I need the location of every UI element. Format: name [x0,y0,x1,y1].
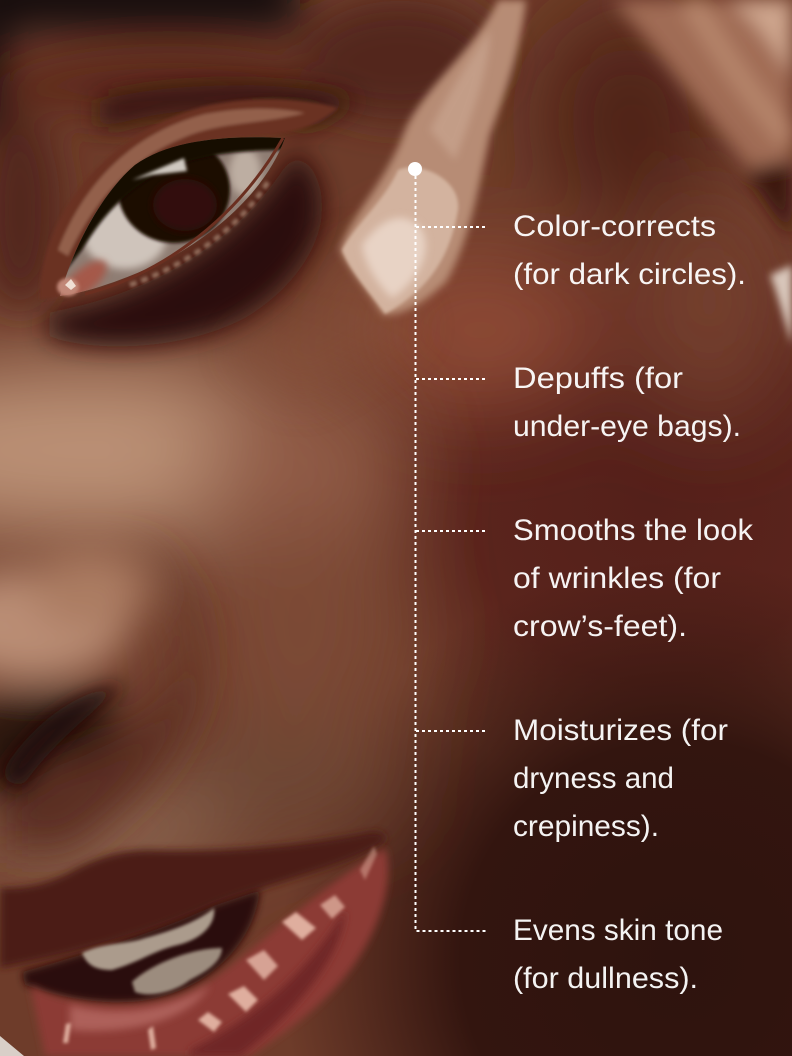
callout: smooths [513,514,754,643]
callout: moisturizes [513,714,728,843]
hand top right [612,0,792,240]
mouth interior [22,890,260,1003]
callout: color-corrects: (for dark circles). [513,258,746,291]
eye socket shadow [48,85,360,346]
brow and forehead [0,0,500,310]
lower lash line [85,138,283,294]
eyelid [40,99,338,300]
callout: smooths: Smooths the look [513,514,754,547]
callout: depuffs: under-eye bags). [513,410,741,443]
skin below socket [280,270,374,358]
cheek right side [312,0,792,1056]
callout: color-corrects [513,210,746,291]
mouth [0,832,388,1056]
callout: moisturizes: crepiness). [513,810,659,843]
serum streak [340,0,526,315]
callout: moisturizes: Moisturizes (for [513,714,728,747]
white background sliver [770,265,792,345]
upper lip [0,832,385,968]
callout leader line [408,162,488,931]
teeth [82,908,214,970]
nose contour [0,530,202,850]
callout: depuffs: Depuffs (for [513,362,683,395]
callout: color-corrects: Color-corrects [513,210,716,243]
callout: depuffs [513,362,741,443]
callout: smooths: crow’s-feet). [513,610,687,643]
cheek and nose left side [0,360,410,870]
eye [55,137,285,298]
callout: moisturizes: dryness and [513,762,674,795]
callout: evens skin tone: Evens skin tone [513,914,723,947]
callout: smooths: of wrinkles (for [513,562,721,595]
callout: evens skin tone: (for dullness). [513,962,698,995]
corner white [0,1036,24,1056]
callout: evens skin tone [513,914,723,995]
marker dot [408,162,422,176]
lower lip [30,848,388,1056]
